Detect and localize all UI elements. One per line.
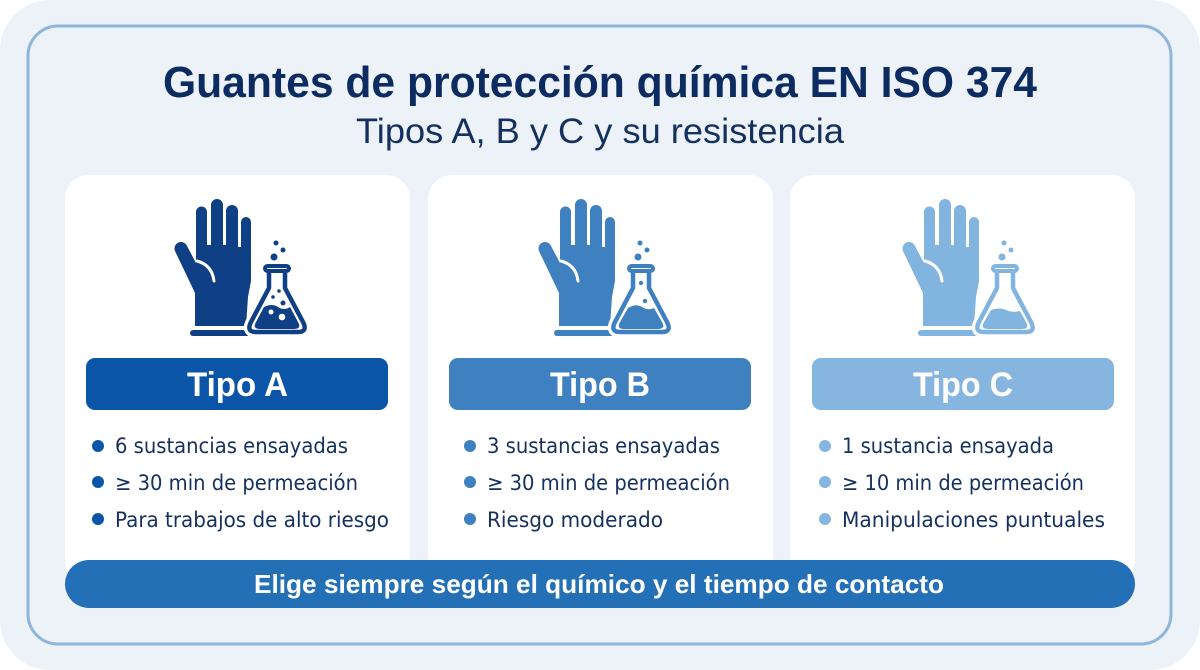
header: Tipo C: Tipo C (913, 366, 1013, 404)
panel: Tipo C (790, 175, 1135, 585)
bottom banner: Elige siempre según el químico y el tiempo de contacto (254, 569, 944, 599)
list: Tipo B: 3 sustancias ensayadas (487, 434, 720, 458)
list: Tipo A: 6 sustancias ensayadas (115, 434, 348, 458)
list: Tipo C: Manipulaciones puntuales (842, 508, 1105, 532)
bottom banner (65, 560, 1135, 608)
icon: glove and flask A (174, 199, 305, 336)
subtitle: Tipos A, B y C y su resistencia (356, 112, 845, 151)
list: Tipo C (819, 434, 1105, 532)
list: Tipo A: Para trabajos de alto riesgo (115, 508, 389, 532)
list: Tipo C: 1 sustancia ensayada (842, 434, 1054, 458)
title: Guantes de protección química EN ISO 374 (163, 58, 1038, 107)
list: Tipo B (464, 434, 730, 532)
header: Tipo C (812, 358, 1114, 410)
header: Tipo B: Tipo B (550, 366, 650, 404)
list: Tipo C: ≥ 10 min de permeación (842, 471, 1084, 495)
icon: glove and flask C (902, 199, 1033, 336)
panel: Tipo B (428, 175, 773, 585)
header: Tipo B (449, 358, 751, 410)
list: Tipo A (92, 434, 389, 532)
list: Tipo A: ≥ 30 min de permeación (115, 471, 358, 495)
header: Tipo A: Tipo A (187, 366, 288, 404)
panel: Tipo A (65, 175, 410, 585)
list: Tipo B: Riesgo moderado (487, 508, 663, 532)
list: Tipo B: ≥ 30 min de permeación (487, 471, 730, 495)
header: Tipo A (86, 358, 388, 410)
icon: glove and flask B (538, 199, 669, 336)
